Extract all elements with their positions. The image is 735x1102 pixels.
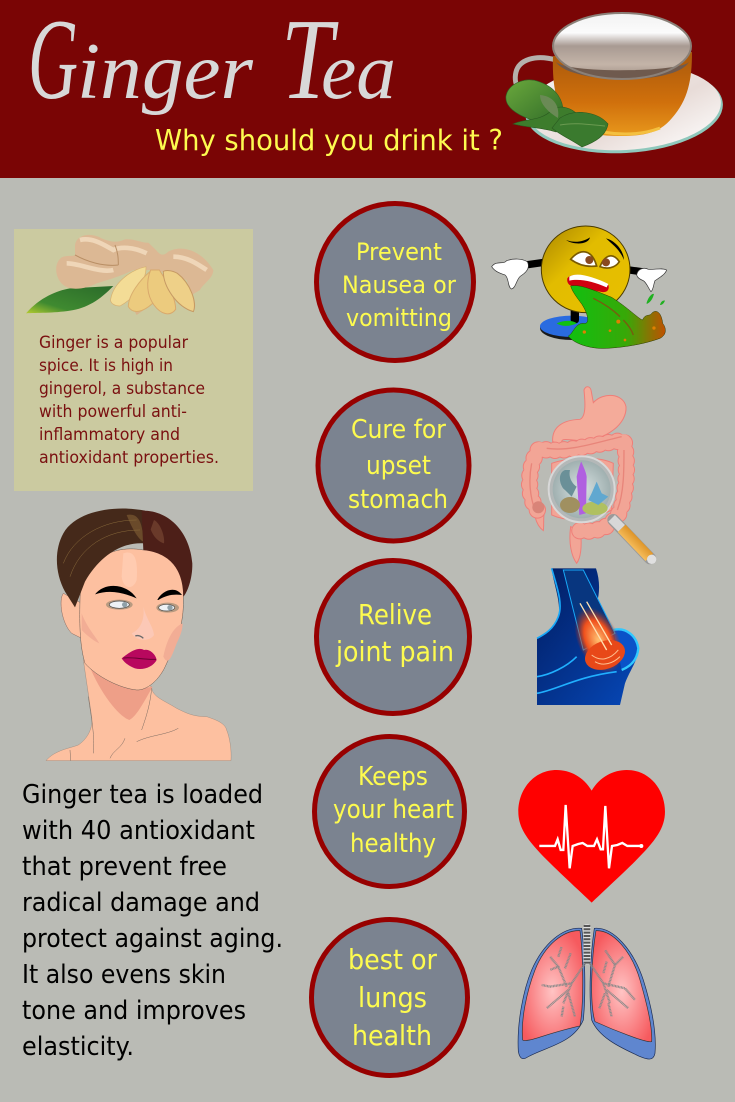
subtitle: Why should you drink it ?	[155, 124, 503, 157]
circle: prevent nausea: Prevent	[356, 238, 442, 266]
text: skin benefits: Ginger tea is loaded	[22, 780, 263, 810]
icon: vomiting emoji	[492, 226, 667, 348]
text: skin benefits: that prevent free	[22, 852, 227, 882]
text: ginger description: antioxidant properties.	[39, 448, 219, 467]
circle: upset stomach: Cure for	[351, 415, 446, 445]
text: skin benefits	[22, 780, 283, 1062]
circle: upset stomach: stomach	[348, 485, 448, 515]
icon: ginger root with slices	[26, 235, 213, 315]
circle: heart health: your heart	[333, 795, 454, 825]
circle: lungs health: lungs	[358, 981, 427, 1014]
icon: heart with ECG line	[518, 770, 665, 903]
text: skin benefits: with 40 antioxidant	[22, 816, 255, 846]
text: ginger description: with powerful anti-	[39, 402, 187, 421]
icon: tea cup with leaves	[506, 13, 725, 158]
circle: lungs health	[312, 920, 468, 1076]
circle: upset stomach	[318, 390, 469, 541]
text: skin benefits: It also evens skin	[22, 960, 226, 990]
circle: joint pain: Relive	[358, 598, 432, 631]
text: ginger description: spice. It is high in	[39, 356, 173, 375]
circle: heart health: Keeps	[358, 762, 428, 792]
circle: joint pain: joint pain	[335, 635, 454, 668]
circle: prevent nausea	[316, 204, 474, 360]
panel: ginger intro	[14, 229, 253, 491]
text: ginger description: Ginger is a popular	[39, 333, 188, 352]
icon: lungs	[518, 924, 655, 1059]
text: ginger description	[39, 333, 219, 467]
text: skin benefits: tone and improves	[22, 996, 246, 1026]
header banner	[0, 0, 735, 178]
icon: digestive system with magnifier	[530, 387, 656, 564]
text: skin benefits: elasticity.	[22, 1032, 134, 1062]
illustration: woman portrait	[46, 509, 231, 761]
circle: prevent nausea: Nausea or	[342, 271, 456, 299]
icon: inflamed elbow joint	[537, 568, 638, 705]
circle: heart health: healthy	[350, 829, 436, 859]
title	[28, 0, 396, 124]
circle: lungs health: health	[352, 1019, 432, 1052]
text: ginger description: gingerol, a substance	[39, 379, 205, 398]
circle: upset stomach: upset	[366, 451, 431, 481]
circle: heart health	[314, 736, 464, 886]
circle: prevent nausea: vomitting	[346, 304, 452, 332]
title: inger	[77, 28, 254, 116]
text: skin benefits: protect against aging.	[22, 924, 283, 954]
circle: lungs health: best or	[348, 943, 437, 976]
circle: joint pain	[316, 560, 470, 714]
title: ea	[321, 28, 396, 116]
text: skin benefits: radical damage and	[22, 888, 260, 918]
text: ginger description: inflammatory and	[39, 425, 180, 444]
